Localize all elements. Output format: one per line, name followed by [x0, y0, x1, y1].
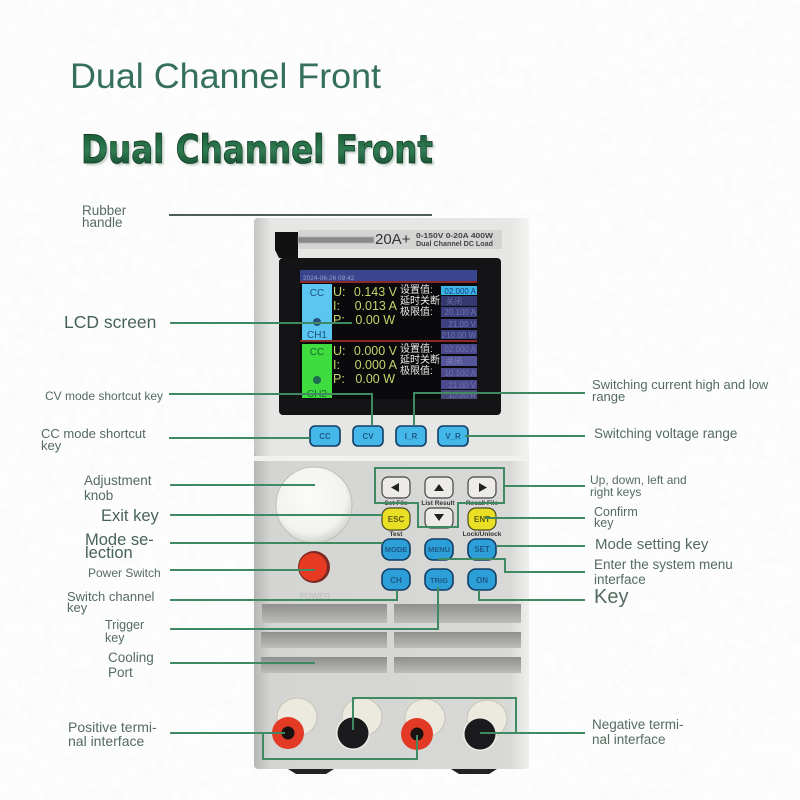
arrow keys: [382, 477, 496, 528]
channel 2 tile: CH2: [307, 389, 327, 400]
channel 1 readings: [333, 285, 398, 327]
power switch: POWER: [300, 592, 330, 601]
rubber feet: [288, 769, 497, 774]
settings values: 10.100 A: [444, 369, 477, 378]
settings labels: [400, 283, 443, 377]
label: arrow keys: Up, down, left and: [590, 473, 687, 487]
label: mode selection: lection: [85, 544, 133, 562]
top shortcut buttons: I_R: [405, 432, 417, 441]
channel 2 readings: U:: [333, 344, 346, 358]
channel 2 readings: P:: [333, 372, 345, 386]
channel 2 readings: I:: [333, 358, 340, 372]
label: rubber handle: Rubber: [82, 203, 127, 218]
label: mode setting key: Mode setting key: [595, 536, 709, 553]
label: positive terminal interface: nal interface: [68, 733, 144, 749]
label: cooling port: Cooling: [108, 650, 154, 665]
channel 1 readings: P:: [333, 313, 345, 327]
channel 1 tile: [302, 284, 332, 341]
lower panel seam: [254, 456, 529, 461]
yellow keys: [382, 508, 496, 530]
blue function keys: SET: [474, 545, 490, 554]
channel 2 readings: 0.000 V: [354, 344, 398, 358]
LCD screen content: 2024-06-26 09:42: [303, 275, 355, 282]
channel 1 tile: CC: [310, 288, 324, 299]
leader lines: [169, 215, 585, 759]
label: CC mode shortcut key: CC mode shortcut: [41, 426, 146, 441]
blue function keys: MENU: [428, 545, 450, 554]
model label strip: 20A+: [375, 231, 411, 248]
label: switching current range: Switching current high and low: [592, 377, 769, 392]
settings values: 关闭: [446, 356, 462, 366]
label: CC mode shortcut key: key: [41, 438, 62, 453]
label: switch channel key: key: [67, 600, 88, 615]
label: switching voltage range: Switching voltage range: [594, 426, 737, 441]
label: CV mode shortcut key: CV mode shortcut key: [45, 389, 163, 403]
channel 2 tile: [302, 344, 332, 400]
small key captions: Lock/Unlock: [463, 531, 502, 538]
settings values: 21.00 V: [448, 381, 477, 390]
label: system menu interface: interface: [594, 572, 646, 587]
settings values: 210.00 W: [442, 331, 476, 340]
blue function keys: MODE: [385, 545, 407, 554]
settings values: 21.00 V: [448, 320, 477, 329]
channel 2 readings: 0.000 A: [355, 358, 398, 372]
top shortcut buttons: CC: [319, 432, 331, 441]
title: bold bevelled: Dual Channel Front: [81, 128, 433, 173]
channel 1 tile: CH1: [307, 330, 327, 341]
channel 2 readings: [333, 344, 398, 386]
settings labels: 延时关断:: [400, 353, 443, 366]
label: negative terminal interface: nal interface: [592, 732, 666, 747]
LCD screen content: [300, 270, 477, 400]
yellow keys: ENT: [474, 515, 490, 524]
settings labels: 极限值:: [400, 305, 433, 318]
label: cooling port: Port: [108, 665, 133, 680]
small key captions: Test: [390, 531, 403, 538]
title: bold bevelled: Dual Channel Front: [83, 130, 435, 175]
small key captions: [384, 500, 502, 538]
label: power switch: Power Switch: [88, 566, 161, 580]
label: trigger key: Trigger: [105, 618, 144, 632]
channel 1 readings: 0.013 A: [355, 299, 398, 313]
top shortcut buttons: [310, 426, 468, 446]
label: key: Key: [594, 586, 628, 608]
channel 1 readings: 0.00 W: [355, 313, 395, 327]
label: switch channel key: Switch channel: [67, 589, 155, 604]
channel 2 tile: CC: [310, 347, 324, 358]
settings labels: 延时关断:: [400, 294, 443, 307]
top shortcut buttons: V_R: [445, 432, 461, 441]
settings labels: 设置值:: [400, 283, 433, 296]
label: LCD screen: LCD screen: [64, 312, 156, 332]
settings values: 02.000 A: [444, 345, 477, 354]
power switch: [298, 551, 330, 601]
black corner trim: [275, 232, 298, 258]
channel 1 readings: 0.143 V: [354, 285, 398, 299]
adjustment knob: [276, 467, 352, 543]
device body: [254, 218, 529, 769]
device: dual channel DC load: [254, 218, 529, 774]
settings values: 02.000 A: [444, 287, 477, 296]
top shortcut buttons: CV: [362, 432, 374, 441]
settings labels: 设置值:: [400, 342, 433, 355]
label: system menu interface: Enter the system menu: [594, 557, 733, 572]
label: confirm key: Confirm: [594, 505, 638, 519]
label: rubber handle: handle: [82, 215, 123, 230]
channel 1 readings: I:: [333, 299, 340, 313]
label: adjustment knob: Adjustment: [84, 473, 152, 488]
cooling vents: [261, 604, 521, 673]
blue function keys: [382, 539, 496, 590]
settings values: 关闭: [446, 296, 462, 306]
blue function keys: TRIG: [430, 576, 448, 585]
LCD bezel: [279, 258, 501, 415]
label: trigger key: key: [105, 631, 125, 645]
terminal: positive 1: [272, 698, 317, 749]
label: switching current range: range: [592, 389, 625, 404]
settings values: [441, 286, 477, 400]
channel 2 readings: 0.00 W: [355, 372, 395, 386]
terminal: negative 2: [463, 700, 507, 751]
terminal: positive 2: [401, 699, 445, 750]
model label strip: [298, 230, 502, 249]
label: arrow keys: right keys: [590, 485, 641, 499]
model label strip: 0-150V 0-20A 400W: [416, 231, 494, 240]
yellow keys: ESC: [388, 515, 404, 524]
title: plain: Dual Channel Front: [70, 57, 381, 96]
label: mode selection: Mode se-: [85, 531, 154, 549]
label: confirm key: key: [594, 516, 614, 530]
channel 1 readings: U:: [333, 285, 346, 299]
small key captions: Set File: [384, 500, 408, 507]
label: negative terminal interface: Negative termi-: [592, 717, 684, 732]
small key captions: Recall File: [466, 500, 498, 507]
label: exit key: Exit key: [101, 507, 160, 525]
label: adjustment knob: knob: [84, 488, 113, 503]
blue function keys: ON: [476, 576, 488, 585]
small key captions: List Result: [421, 500, 455, 507]
model label strip: Dual Channel DC Load: [416, 239, 493, 248]
blue function keys: CH: [390, 576, 402, 585]
settings values: 20.100 A: [444, 308, 477, 317]
settings values: 10.00 R: [448, 391, 476, 400]
settings labels: 极限值:: [400, 364, 433, 377]
terminal: negative 1: [336, 698, 382, 750]
label: positive terminal interface: Positive termi-: [68, 719, 157, 735]
upper panel: [254, 218, 529, 456]
